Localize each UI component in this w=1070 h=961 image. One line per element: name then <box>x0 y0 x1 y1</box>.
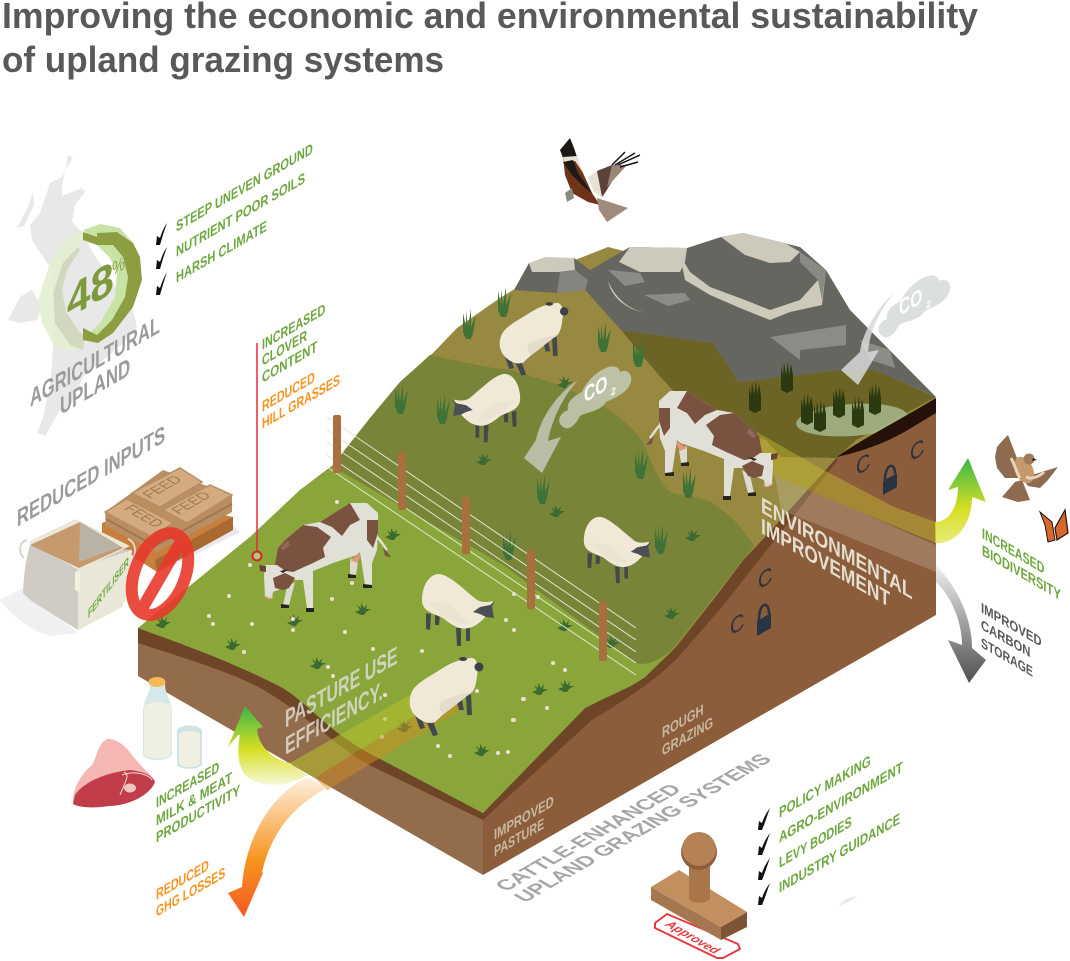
icon: feed sacks on pallet: FEED <box>120 502 167 530</box>
label: reduced GHG: REDUCED <box>156 856 209 904</box>
icon: approved stamp <box>651 832 747 958</box>
CO2 cloud upper: 2 <box>926 298 931 312</box>
chart: 48 percent ring <box>38 224 142 350</box>
grass tufts and flowers <box>155 287 881 758</box>
soil dark layer right <box>483 457 837 820</box>
heading: cattle-enhanced upland grazing systems: CATTLE-ENHANCED <box>490 781 687 895</box>
carbon locks: C <box>758 561 772 595</box>
heading: reduced inputs: REDUCED INPUTS <box>17 420 165 533</box>
translucent band: environmental improvement <box>757 432 936 572</box>
map: UK outline <box>8 155 137 436</box>
chart: 48 percent ring: 48 <box>67 250 114 329</box>
CO2 cloud lower: CO <box>584 369 607 408</box>
sheep: second <box>452 374 520 442</box>
icon: fertiliser bag: FERTILISER <box>88 552 129 622</box>
arrow: increased biodiversity <box>935 458 986 543</box>
hillside: improved pasture zone <box>138 467 676 813</box>
carbon locks: C <box>910 433 924 467</box>
heading: environmental improvement: IMPROVEMENT <box>761 513 890 613</box>
callout: clover and hill grasses <box>252 300 340 560</box>
heading: agricultural upland: AGRICULTURAL <box>30 310 160 413</box>
soil labels: PASTURE <box>494 815 544 861</box>
label: improved carbon storage: STORAGE <box>981 634 1033 680</box>
soil labels: GRAZING <box>662 713 713 760</box>
callout: clover and hill grasses: CLOVER <box>262 327 307 370</box>
faint shadow mark <box>839 896 858 906</box>
soil labels: ROUGH <box>662 701 704 742</box>
cow: upper <box>646 391 778 500</box>
list: upland challenges: NUTRIENT POOR SOILS <box>176 169 305 261</box>
label: improved carbon storage <box>981 599 1042 680</box>
CO2 cloud lower: 2 <box>611 385 616 399</box>
CO2 cloud lower <box>524 366 631 473</box>
soil dark layer front <box>138 628 483 820</box>
hillside: olive upland base <box>138 247 936 813</box>
sheep: right <box>584 517 651 583</box>
hillside: rough grazing zone <box>333 355 754 677</box>
CO2 cloud upper: CO <box>899 282 922 321</box>
heading: environmental improvement: ENVIRONMENTAL <box>761 492 913 605</box>
icon: fertiliser bag <box>0 519 135 636</box>
CO2 cloud upper <box>841 275 950 385</box>
callout: clover and hill grasses: HILL GRASSES <box>262 371 340 433</box>
callout: clover and hill grasses: INCREASED <box>262 300 325 354</box>
icon: feed sacks on pallet: FEED <box>139 473 187 501</box>
hillside: dark wet upland zone <box>621 330 936 458</box>
label: improved carbon storage: IMPROVED <box>981 599 1042 650</box>
heading: pasture use efficiency: EFFICIENCY. <box>285 676 383 761</box>
callout: clover and hill grasses: REDUCED <box>262 368 315 416</box>
icon: feed sacks on pallet <box>102 468 240 572</box>
icon: meat <box>73 739 155 807</box>
arrow: improved carbon storage <box>936 565 986 683</box>
list: stakeholders: AGRO-ENVIRONMENT <box>779 758 903 847</box>
cow: front <box>259 503 391 612</box>
translucent band: pasture use efficiency <box>290 695 465 790</box>
carbon locks <box>730 433 924 641</box>
soil labels <box>494 701 713 861</box>
heading: pasture use efficiency: PASTURE USE <box>285 641 398 734</box>
heading: agricultural upland: UPLAND <box>60 352 130 421</box>
callout: clover and hill grasses: CONTENT <box>262 338 317 387</box>
arrow: increased productivity <box>228 706 307 785</box>
title: of upland grazing systems <box>2 39 444 80</box>
heading: agricultural upland <box>30 310 160 421</box>
label: milk and meat: INCREASED <box>156 758 219 812</box>
rocks <box>514 233 936 397</box>
list: stakeholders: POLICY MAKING <box>779 752 871 822</box>
soil labels: IMPROVED <box>494 792 554 844</box>
sheep: top <box>500 302 568 376</box>
block: soil front side <box>138 628 483 875</box>
label: reduced GHG: GHG LOSSES <box>156 864 225 921</box>
label: improved carbon storage: CARBON <box>981 616 1030 661</box>
arrow: reduced GHG losses <box>228 777 327 917</box>
list: upland challenges: STEEP UNEVEN GROUND <box>176 140 313 236</box>
carbon locks: C <box>856 447 870 481</box>
label: milk and meat: PRODUCTIVITY <box>156 781 240 847</box>
no symbol <box>121 525 199 623</box>
icon: sparrow <box>995 435 1058 502</box>
list: upland challenges: HARSH CLIMATE <box>176 217 267 287</box>
fence <box>327 415 636 675</box>
title <box>2 0 978 80</box>
icon: red kite <box>560 138 640 222</box>
sheep: front <box>410 657 484 736</box>
list: stakeholders: LEVY BODIES <box>779 813 852 872</box>
peat layer <box>837 398 936 457</box>
icon: milk bottle and glass <box>143 677 202 769</box>
sheep: middle <box>422 574 495 646</box>
label: milk and meat: MILK & MEAT <box>156 769 232 830</box>
chart: 48 percent ring: % <box>112 252 125 281</box>
block: soil right side <box>483 398 936 875</box>
icon: approved stamp: Approved <box>661 919 725 956</box>
label: increased biodiversity: INCREASED <box>982 525 1044 578</box>
icon: feed sacks on pallet: FEED <box>168 489 216 517</box>
heading: cattle-enhanced upland grazing systems: UPLAND GRAZING SYSTEMS <box>509 751 777 906</box>
carbon locks: C <box>730 607 744 641</box>
list: stakeholders: INDUSTRY GUIDANCE <box>779 810 900 897</box>
list: stakeholders <box>758 752 903 905</box>
list: upland challenges <box>156 140 313 295</box>
wet flush <box>795 400 909 440</box>
icon: butterfly <box>1040 510 1068 542</box>
